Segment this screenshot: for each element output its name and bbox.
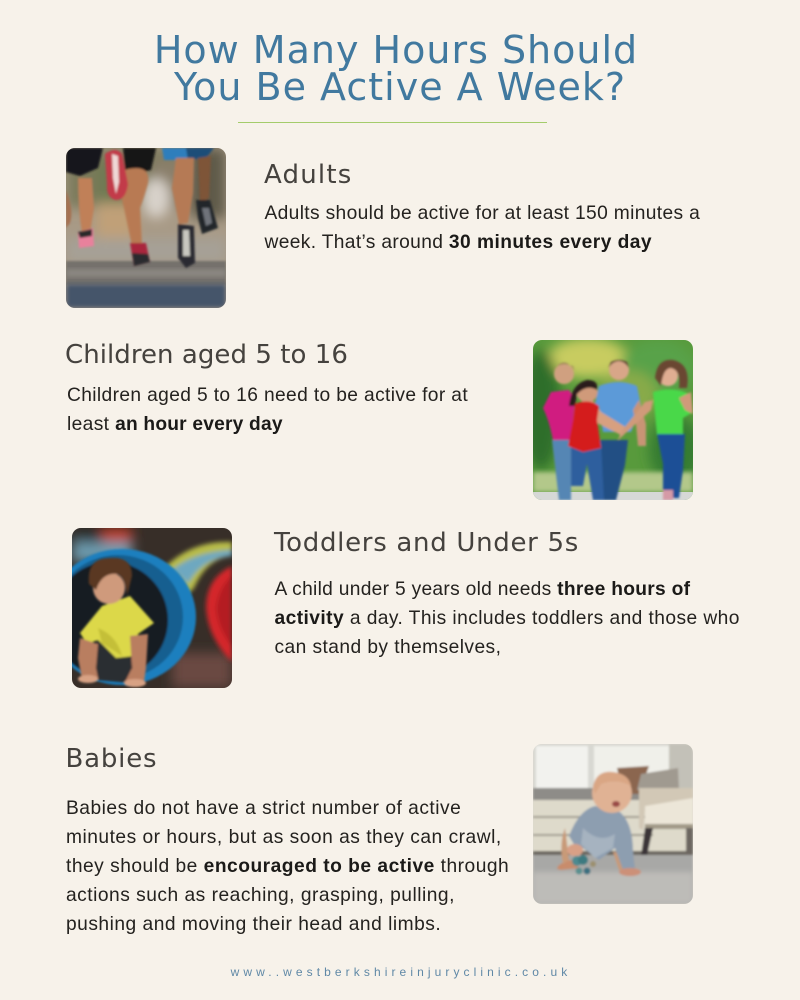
text: babies: minutes or hours, but as soon as they can crawl, <box>66 827 502 848</box>
text: babies: Babies do not have a strict number of active <box>66 798 461 819</box>
text: babies: they should be encouraged to be active through <box>66 856 509 877</box>
text: adults <box>264 203 700 253</box>
heading: children: Children aged 5 to 16 <box>65 340 348 370</box>
website footer: www..westberkshireinjuryclinic.co.uk <box>231 965 571 979</box>
text: babies: actions such as reaching, grasping, pulling, <box>66 885 455 906</box>
text: adults: week. That’s around 30 minutes every day <box>264 232 652 253</box>
title: You Be Active A Week? <box>174 65 626 109</box>
heading: babies: Babies <box>66 744 157 774</box>
photo: runners' legs <box>66 148 226 308</box>
heading: toddlers: Toddlers and Under 5s <box>274 528 579 558</box>
text: toddlers: activity a day. This includes toddlers and those who <box>274 608 740 629</box>
text: babies <box>66 798 509 935</box>
text: babies: pushing and moving their head and limbs. <box>66 914 441 935</box>
text: toddlers: can stand by themselves, <box>274 637 501 658</box>
text: children: least an hour every day <box>67 414 283 435</box>
tunnel ring <box>72 548 198 686</box>
text: children <box>67 385 468 435</box>
title <box>154 28 638 109</box>
photo: baby crawling <box>533 744 693 904</box>
heading: adults: Adults <box>264 160 352 190</box>
text: adults: Adults should be active for at least 150 minutes a <box>264 203 700 224</box>
text: toddlers <box>274 579 740 658</box>
text: toddlers: A child under 5 years old needs three hours of <box>274 579 690 600</box>
photo: children running <box>533 340 693 500</box>
photo: toddler in play tunnel <box>72 528 232 688</box>
text: children: Children aged 5 to 16 need to be active for at <box>67 385 468 406</box>
title: How Many Hours Should <box>154 28 638 72</box>
